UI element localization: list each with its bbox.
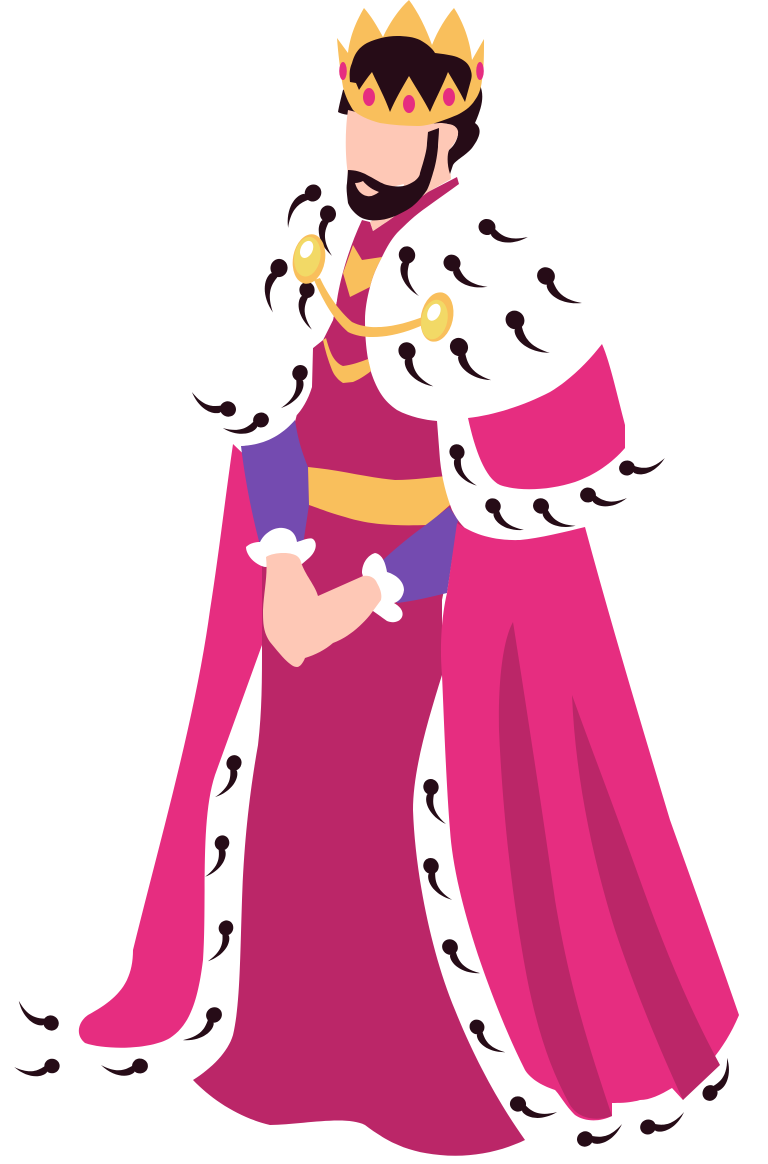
left brooch xyxy=(289,232,329,286)
left cape xyxy=(79,444,270,1048)
left cuff xyxy=(246,528,316,567)
left fur collar xyxy=(200,230,337,446)
hair back xyxy=(413,70,482,174)
mouth xyxy=(355,181,379,196)
gown and torso xyxy=(193,177,525,1156)
collar gold chevron xyxy=(343,245,382,297)
left sleeve xyxy=(241,420,309,545)
face xyxy=(346,110,432,195)
right brooch xyxy=(416,289,458,345)
ermine spots xyxy=(13,180,736,1152)
crown xyxy=(337,0,484,126)
crown gems xyxy=(339,62,484,113)
right sleeve xyxy=(383,507,458,603)
hair front tuft xyxy=(338,85,362,115)
lower gold necklace xyxy=(323,338,371,383)
right shoulder cape xyxy=(468,344,625,489)
right cuff xyxy=(362,553,404,622)
right fur collar xyxy=(365,184,625,540)
belt xyxy=(308,467,450,525)
beard xyxy=(347,128,439,220)
ear xyxy=(436,124,458,150)
gold chain xyxy=(314,278,425,337)
neck xyxy=(370,120,451,231)
cape fold: left xyxy=(499,622,612,1119)
hand xyxy=(263,553,381,667)
hair top xyxy=(350,36,472,112)
right cape xyxy=(441,523,739,1120)
left shoulder cape xyxy=(228,328,294,397)
cape fold: right xyxy=(572,695,720,1100)
